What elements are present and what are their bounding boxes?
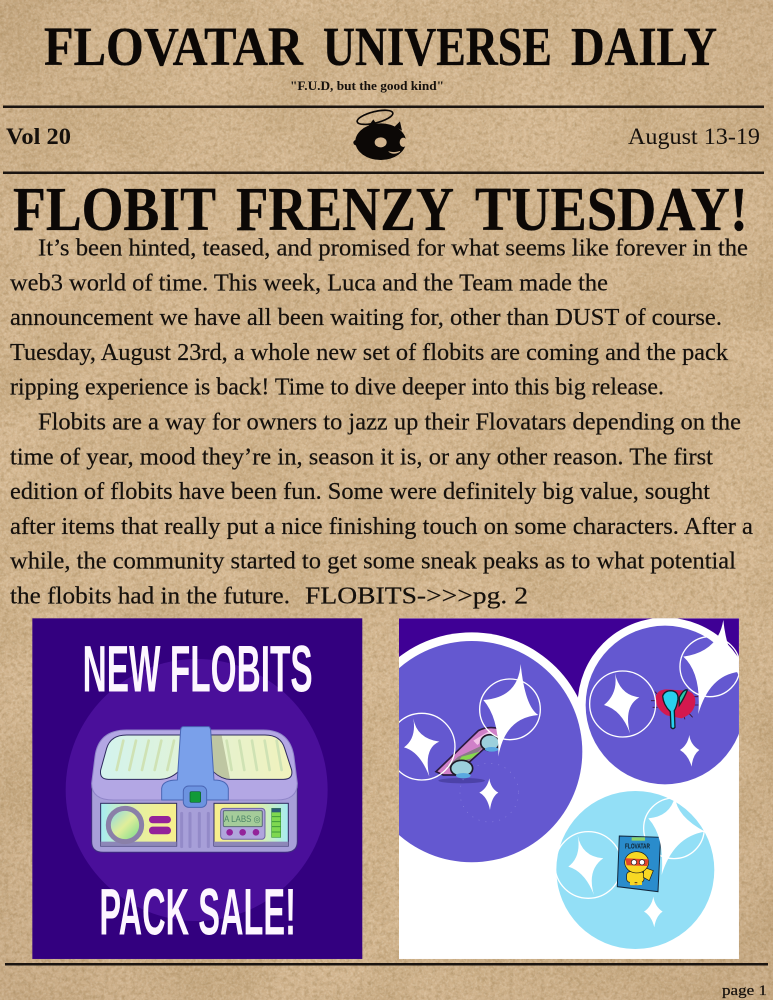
paragraph one: ripping experience is back! Time to dive deeper into this big release. (10, 375, 664, 401)
paragraph two: while, the community started to get some sneak peaks as to what potential (10, 549, 736, 575)
icon: hoverboard (436, 728, 499, 778)
icon: flovatar comic (617, 836, 661, 892)
tagline: "F.U.D, but the good kind" (290, 78, 444, 93)
headline: FRENZY (236, 175, 454, 244)
paragraph two: FLOBITS->>>pg. 2 (305, 584, 528, 610)
paragraph two: Flobits are a way for owners to jazz up their Flovatars depending on the (38, 410, 741, 436)
headline: FLOBIT (13, 175, 216, 244)
icon: flobit pack box: A LABS ◎ (224, 814, 261, 824)
heading: new flobits: NEW FLOBITS (83, 631, 313, 705)
volume number: Vol 20 (6, 124, 71, 149)
paragraph one: announcement we have all been waiting for, other than DUST of course. (10, 305, 722, 331)
icon: flovatar halo logo (353, 107, 407, 160)
panel: new flobits pack sale: PACK SALE! (99, 875, 296, 949)
paragraph one (10, 236, 748, 401)
paragraph two: edition of flobits have been fun. Some were definitely big value, sought (10, 479, 710, 505)
icon: flobit pack box (92, 727, 297, 852)
masthead title: DAILY (571, 16, 717, 77)
footer rule (5, 963, 768, 966)
paragraph two (10, 410, 753, 610)
circle: comic flobit (555, 791, 714, 949)
circle: hoverboard flobit (399, 641, 582, 862)
page number: page 1 (722, 983, 767, 999)
paragraph two: the flobits had in the future. (10, 584, 290, 610)
paragraph one: web3 world of time. This week, Luca and the Team made the (10, 270, 608, 296)
headline: TUESDAY! (475, 175, 748, 244)
panel: flobit previews (399, 618, 739, 959)
masthead title: UNIVERSE (323, 16, 552, 77)
masthead bottom rule (3, 172, 764, 174)
issue date: August 13-19 (628, 124, 760, 149)
article text (10, 236, 753, 610)
headline (13, 175, 748, 244)
icon: melting heart (651, 689, 699, 729)
icon: flovatar comic: FLOVATAR (625, 844, 650, 851)
circle: heart flobit (586, 620, 744, 784)
paragraph two: after items that really put a nice finishing touch on some characters. After a (10, 514, 753, 540)
paragraph one: Tuesday, August 23rd, a whole new set of flobits are coming and the pack (10, 340, 728, 366)
paragraph two: time of year, mood they’re in, season it is, or any other reason. The first (10, 444, 713, 470)
masthead title (44, 16, 717, 77)
masthead top rule (3, 106, 764, 108)
paragraph one: It’s been hinted, teased, and promised for what seems like forever in the (38, 236, 748, 262)
panel: new flobits pack sale (32, 618, 362, 959)
masthead title: FLOVATAR (44, 16, 304, 77)
